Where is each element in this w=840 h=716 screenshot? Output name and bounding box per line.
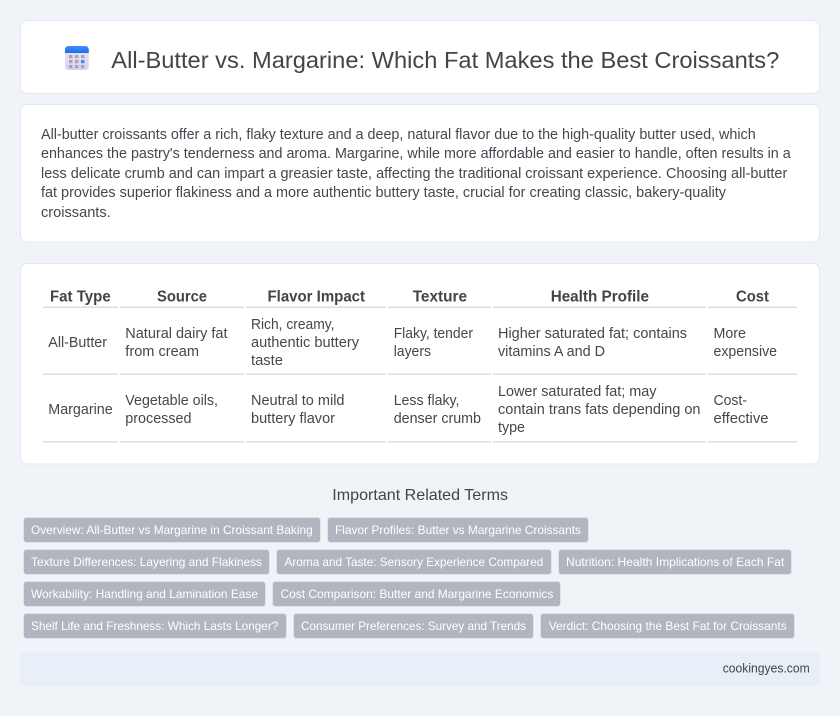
tag: cost comparison: Cost Comparison: Butter and Margarine Economics <box>280 587 553 601</box>
tag: verdict: Verdict: Choosing the Best Fat for Croissants <box>549 619 787 633</box>
table row: margarine: Cost- <box>714 393 747 409</box>
tag: aroma and taste: Aroma and Taste: Sensory Experience Compared <box>284 555 543 569</box>
table row: margarine: Less flaky, <box>394 393 460 409</box>
table header row: Source <box>157 288 207 306</box>
table row: margarine: Lower saturated fat; may <box>498 384 657 400</box>
table row: margarine: buttery flavor <box>251 411 335 427</box>
text block: summary paragraph: croissants. <box>41 205 111 221</box>
table header row: Health Profile <box>551 288 649 306</box>
table row: margarine: contain trans fats depending on <box>498 402 700 418</box>
text block: summary paragraph: less delicate crumb and can impart a greasier taste, affecting the traditional croissant experience. Choosing all-butter <box>41 166 787 182</box>
table row: margarine: denser crumb <box>394 411 481 427</box>
table row: margarine: processed <box>125 411 192 427</box>
table header row <box>50 288 769 306</box>
tag: cost comparison <box>272 582 560 606</box>
table row: all-butter: Higher saturated fat; contains <box>498 326 687 342</box>
tag: workability <box>24 582 266 606</box>
table header row: Fat Type <box>50 288 111 306</box>
table header row: Texture <box>413 288 467 306</box>
text block: summary paragraph: enhances the pastry's tenderness and aroma. Margarine, while more affordable and easier to handle, often results in a <box>41 146 791 162</box>
table row: all-butter: from cream <box>125 344 199 360</box>
panel: comparison table <box>20 264 820 464</box>
tag: flavor profiles <box>328 518 588 542</box>
table row: margarine: Vegetable oils, <box>125 393 218 409</box>
tag: overview: Overview: All-Butter vs Margarine in Croissant Baking <box>31 523 313 537</box>
tag: verdict <box>540 614 794 638</box>
panel: related term tags <box>24 518 794 638</box>
panel: introduction text <box>20 104 820 242</box>
text block: summary paragraph: fat provides superior flakiness and a more authentic buttery taste, crucial for creating classic, bakery-quality <box>41 185 727 201</box>
title: All-Butter vs. Margarine: Which Fat Makes the Best Croissants? <box>111 47 779 73</box>
table header row: Flavor Impact <box>268 288 365 306</box>
table row: all-butter: expensive <box>714 344 777 360</box>
tag: nutrition: Nutrition: Health Implications of Each Fat <box>566 555 785 569</box>
table row: margarine: effective <box>714 411 768 427</box>
table header row: Cost <box>736 288 769 306</box>
footer: cookingyes.com <box>723 662 810 676</box>
table row: all-butter: layers <box>394 344 431 360</box>
tag: aroma and taste <box>276 550 552 574</box>
tag: nutrition <box>558 550 792 574</box>
tag: shelf life <box>24 614 286 638</box>
icon: calendar <box>65 46 89 70</box>
tag: overview <box>24 518 320 542</box>
table row: all-butter: taste <box>251 353 283 369</box>
tag: consumer preferences <box>294 614 534 638</box>
table row: margarine: Margarine <box>48 402 113 418</box>
text block: summary paragraph <box>41 127 791 221</box>
table row: all-butter: Rich, creamy, <box>251 317 334 333</box>
table row: all-butter: All-Butter <box>48 335 107 351</box>
tag: consumer preferences: Consumer Preferences: Survey and Trends <box>301 619 526 633</box>
tag: shelf life: Shelf Life and Freshness: Which Lasts Longer? <box>31 619 279 633</box>
tag: workability: Workability: Handling and Lamination Ease <box>31 587 258 601</box>
table row: all-butter: vitamins A and D <box>498 344 605 360</box>
table row: all-butter <box>48 317 777 369</box>
table row: margarine: Neutral to mild <box>251 393 344 409</box>
footer <box>20 652 820 686</box>
heading: important related terms: Important Related Terms <box>332 487 508 504</box>
table row: all-butter: Flaky, tender <box>394 326 473 342</box>
table row: margarine <box>48 384 769 436</box>
table row: all-butter: authentic buttery <box>251 335 360 351</box>
table row: all-butter: Natural dairy fat <box>125 326 228 342</box>
text block: summary paragraph: All-butter croissants offer a rich, flaky texture and a deep, natural flavor due to the high-quality butter used, which <box>41 127 756 143</box>
table row: all-butter: More <box>714 326 746 342</box>
tag: texture differences: Texture Differences: Layering and Flakiness <box>31 555 262 569</box>
tag: texture differences <box>24 550 270 574</box>
table row: margarine: type <box>498 420 525 436</box>
panel: title header <box>20 20 820 94</box>
tag: flavor profiles: Flavor Profiles: Butter vs Margarine Croissants <box>335 523 581 537</box>
